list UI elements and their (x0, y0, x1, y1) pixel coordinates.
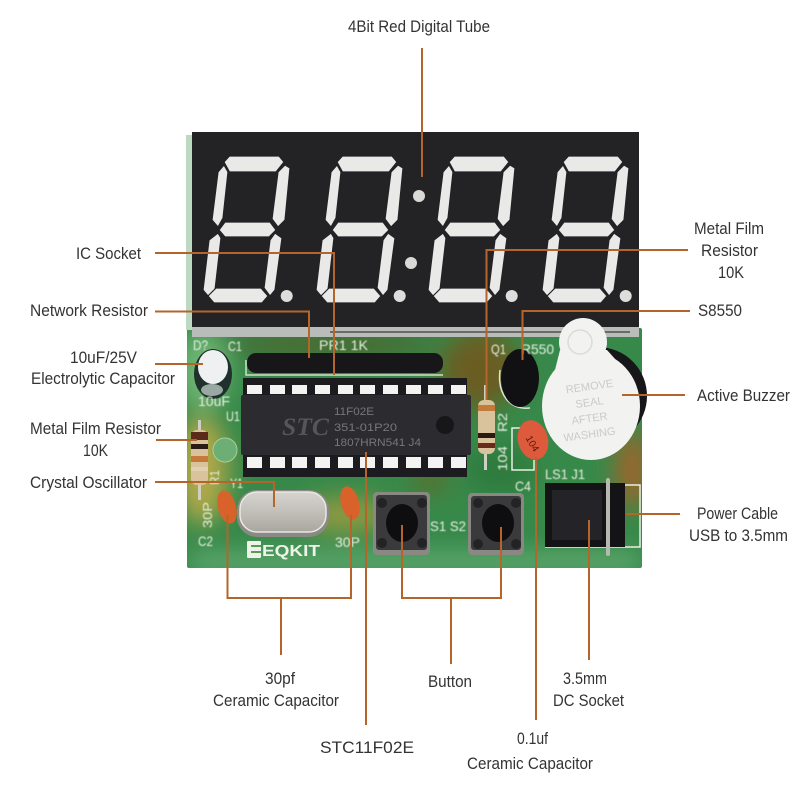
0.1uf ceramic capacitor: 104 (523, 434, 541, 454)
label: Metal Film Resistor 10K (left): Metal Film Resistor (30, 419, 161, 438)
label: Power Cable USB to 3.5mm: USB to 3.5mm (689, 526, 788, 545)
leader: IC Socket (155, 253, 334, 375)
active buzzer: AFTER (571, 411, 608, 427)
PCB silkscreen labels: Y1 (230, 475, 243, 491)
PCB silkscreen labels: D? (193, 337, 208, 353)
label: IC Socket: IC Socket (76, 244, 141, 263)
PCB silkscreen labels: R1 (208, 470, 222, 485)
button S2 (468, 493, 524, 555)
S8550 transistor (500, 349, 539, 408)
label: Metal Film Resistor 10K (left) (30, 419, 161, 460)
leader: STC11F02E (365, 452, 367, 725)
PCB silkscreen labels: C1 (228, 338, 242, 354)
leader: Electrolytic Capacitor (155, 363, 203, 365)
PCB board (176, 328, 648, 568)
label: 10uF/25V Electrolytic Capacitor (31, 348, 175, 388)
PCB silkscreen labels (193, 337, 585, 550)
leader: 3.5mm DC Socket (588, 520, 590, 660)
label: STC11F02E: STC11F02E (320, 738, 414, 757)
label: S8550: S8550 (698, 301, 742, 320)
left ceramic capacitor (214, 488, 240, 526)
EQKIT logo (247, 541, 320, 560)
label: Active Buzzer: Active Buzzer (697, 386, 790, 405)
label: 30pf Ceramic Capacitor: Ceramic Capacitor (213, 691, 339, 710)
leader: left Metal Film Resistor (156, 439, 197, 441)
digit 2 (316, 156, 406, 303)
label: 30pf Ceramic Capacitor: 30pf (265, 669, 295, 688)
label: 4Bit Red Digital Tube: 4Bit Red Digital Tube (348, 17, 490, 36)
label: Metal Film Resistor 10K (left): 10K (83, 441, 109, 460)
PCB silkscreen labels: 104 (496, 446, 510, 471)
IC socket and chip (241, 378, 471, 477)
IC socket and chip: 1807HRN541 J4 (334, 437, 421, 449)
digit 3 (428, 156, 518, 303)
mounting hole (213, 438, 237, 462)
colon (405, 190, 425, 269)
label: 30pf Ceramic Capacitor (213, 669, 339, 710)
IC socket and chip: 351-01P20 (334, 422, 397, 434)
label: Crystal Oscillator: Crystal Oscillator (30, 473, 147, 492)
electrolytic capacitor (194, 349, 232, 399)
leader: 30pf Ceramic Capacitor (228, 515, 351, 655)
leader: Power Cable (626, 513, 680, 515)
label: Metal Film Resistor 10K (right) (694, 219, 764, 282)
label: Metal Film Resistor 10K (right): Metal Film (694, 219, 764, 238)
PCB silkscreen labels: LS1 J1 (545, 466, 585, 482)
label: Button: Button (428, 672, 472, 691)
active buzzer: REMOVE (565, 378, 614, 396)
PCB silkscreen labels: Q1 (491, 341, 506, 357)
label: 0.1uf Ceramic Capacitor: Ceramic Capacitor (467, 754, 593, 773)
PCB silkscreen labels: R2 (496, 413, 510, 432)
right metal film resistor (478, 385, 495, 470)
label: Power Cable USB to 3.5mm (689, 504, 788, 545)
left metal film resistor (191, 420, 208, 500)
leader: 0.1uf Ceramic Capacitor (535, 457, 537, 720)
button S1 (373, 492, 430, 555)
leader: Network Resistor (155, 312, 309, 358)
label: 3.5mm DC Socket: DC Socket (553, 691, 624, 710)
leader: 4Bit Red Digital Tube (421, 48, 423, 177)
PCB silkscreen labels: R550 (521, 341, 554, 357)
resistor network (246, 353, 443, 375)
digit 1 (203, 156, 293, 303)
PCB silkscreen labels: PR1 1K (319, 337, 369, 353)
PCB silkscreen labels: 10uF (198, 393, 230, 409)
leader: Crystal Oscillator (155, 482, 274, 507)
leader: Active Buzzer (622, 394, 685, 396)
label: 3.5mm DC Socket (553, 669, 624, 710)
3.5mm DC socket (545, 478, 640, 556)
crystal oscillator (237, 490, 329, 537)
active buzzer: SEAL (575, 395, 604, 411)
PCB silkscreen labels: C4 (515, 478, 531, 494)
label: 10uF/25V Electrolytic Capacitor: Electrolytic Capacitor (31, 369, 175, 388)
label: 0.1uf Ceramic Capacitor (467, 729, 593, 773)
label: 3.5mm DC Socket: 3.5mm (563, 669, 607, 688)
PCB silkscreen labels: U1 (226, 408, 240, 424)
0.1uf ceramic capacitor (512, 417, 553, 470)
digit 4 (542, 156, 632, 303)
right ceramic capacitor (337, 484, 363, 522)
PCB silkscreen labels: 30P (201, 502, 215, 528)
label: Metal Film Resistor 10K (right): 10K (718, 263, 745, 282)
active buzzer (542, 318, 647, 460)
PCB silkscreen labels: C2 (198, 533, 213, 549)
label: Metal Film Resistor 10K (right): Resistor (701, 241, 758, 260)
label: 0.1uf Ceramic Capacitor: 0.1uf (517, 729, 548, 748)
leader: S8550 (522, 311, 690, 360)
PCB silkscreen labels: S1 S2 (430, 518, 466, 534)
active buzzer: WASHING (563, 425, 616, 445)
leader: Button (402, 525, 501, 664)
EQKIT logo: EQKIT (262, 543, 320, 560)
IC socket and chip: STC (282, 414, 329, 441)
label: Power Cable USB to 3.5mm: Power Cable (697, 504, 778, 523)
label: Network Resistor: Network Resistor (30, 301, 148, 320)
label: 10uF/25V Electrolytic Capacitor: 10uF/25V (70, 348, 138, 367)
leader: right Metal Film Resistor (486, 250, 688, 400)
display module (186, 132, 639, 337)
IC socket and chip: 11F02E (334, 406, 374, 418)
PCB silkscreen labels: 30P (335, 534, 360, 550)
